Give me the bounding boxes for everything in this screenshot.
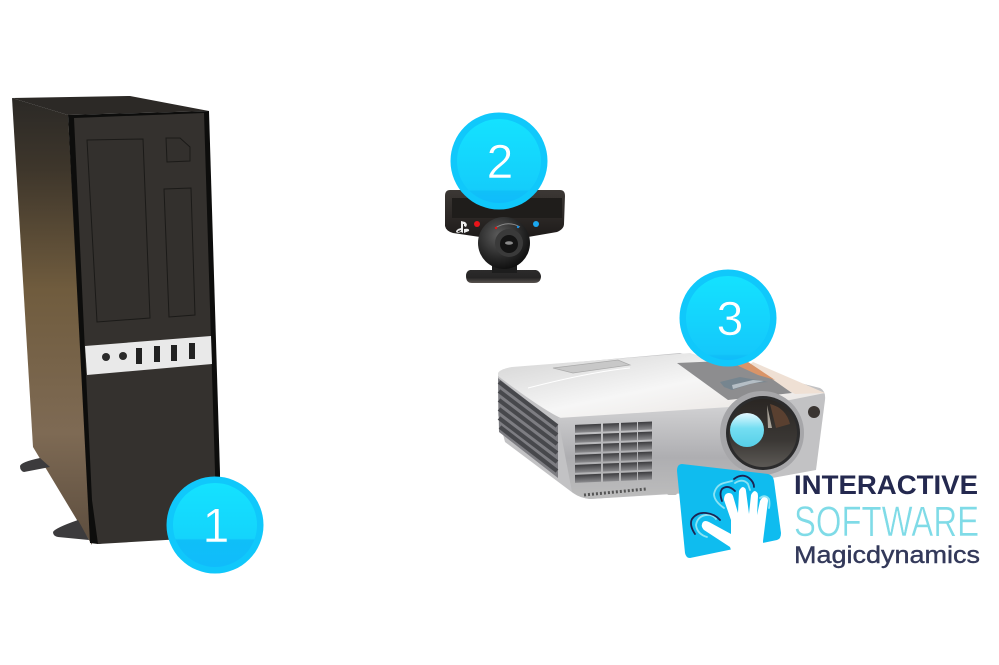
white hand: [702, 487, 768, 562]
badge 1: [166, 476, 264, 574]
badge 3: 3: [717, 293, 743, 346]
icon: projector: [498, 353, 825, 499]
projector body: [498, 353, 825, 499]
blue light: [533, 221, 539, 227]
projector foot: [667, 490, 677, 495]
camera lens ball: [478, 217, 530, 269]
red light: [474, 221, 480, 227]
camera stem: [492, 260, 517, 273]
tower side panel: [12, 98, 92, 545]
badge 1: 1: [203, 500, 229, 553]
small door: [166, 138, 190, 162]
badge 2: 2: [487, 136, 513, 189]
peach top bevel: [745, 362, 825, 394]
logo text: INTERACTIVE: INTERACTIVE: [794, 470, 978, 500]
bottom vents: [584, 489, 646, 495]
front grille: [575, 422, 652, 483]
camera base: [466, 270, 541, 283]
icon: desktop computer tower: [12, 96, 220, 545]
camera mesh: [452, 198, 562, 218]
drive bay upper left: [87, 139, 150, 322]
projector front: [558, 407, 740, 499]
playstation logo: [456, 221, 469, 233]
tower top panel: [12, 96, 209, 115]
projector lens: [720, 391, 804, 475]
sensor: [808, 406, 820, 418]
logo: touch hand icon: [677, 464, 781, 562]
projector top: [498, 353, 825, 421]
badge 2: [450, 112, 548, 210]
white port strip: [85, 336, 212, 375]
logo text: Magicdynamics: Magicdynamics: [794, 542, 980, 569]
slim drive bay: [164, 188, 195, 317]
focus panel: [677, 360, 792, 400]
tower feet: [20, 458, 89, 540]
camera body: [445, 190, 565, 237]
tower front panel: [74, 113, 217, 544]
touch ripples: [691, 476, 770, 537]
left vents: [498, 378, 558, 478]
badge 3: [680, 270, 776, 366]
projector control bar: [553, 360, 630, 373]
icon: motion camera: [445, 190, 565, 283]
tower front frame: [68, 111, 220, 544]
projector top seam: [528, 368, 630, 388]
